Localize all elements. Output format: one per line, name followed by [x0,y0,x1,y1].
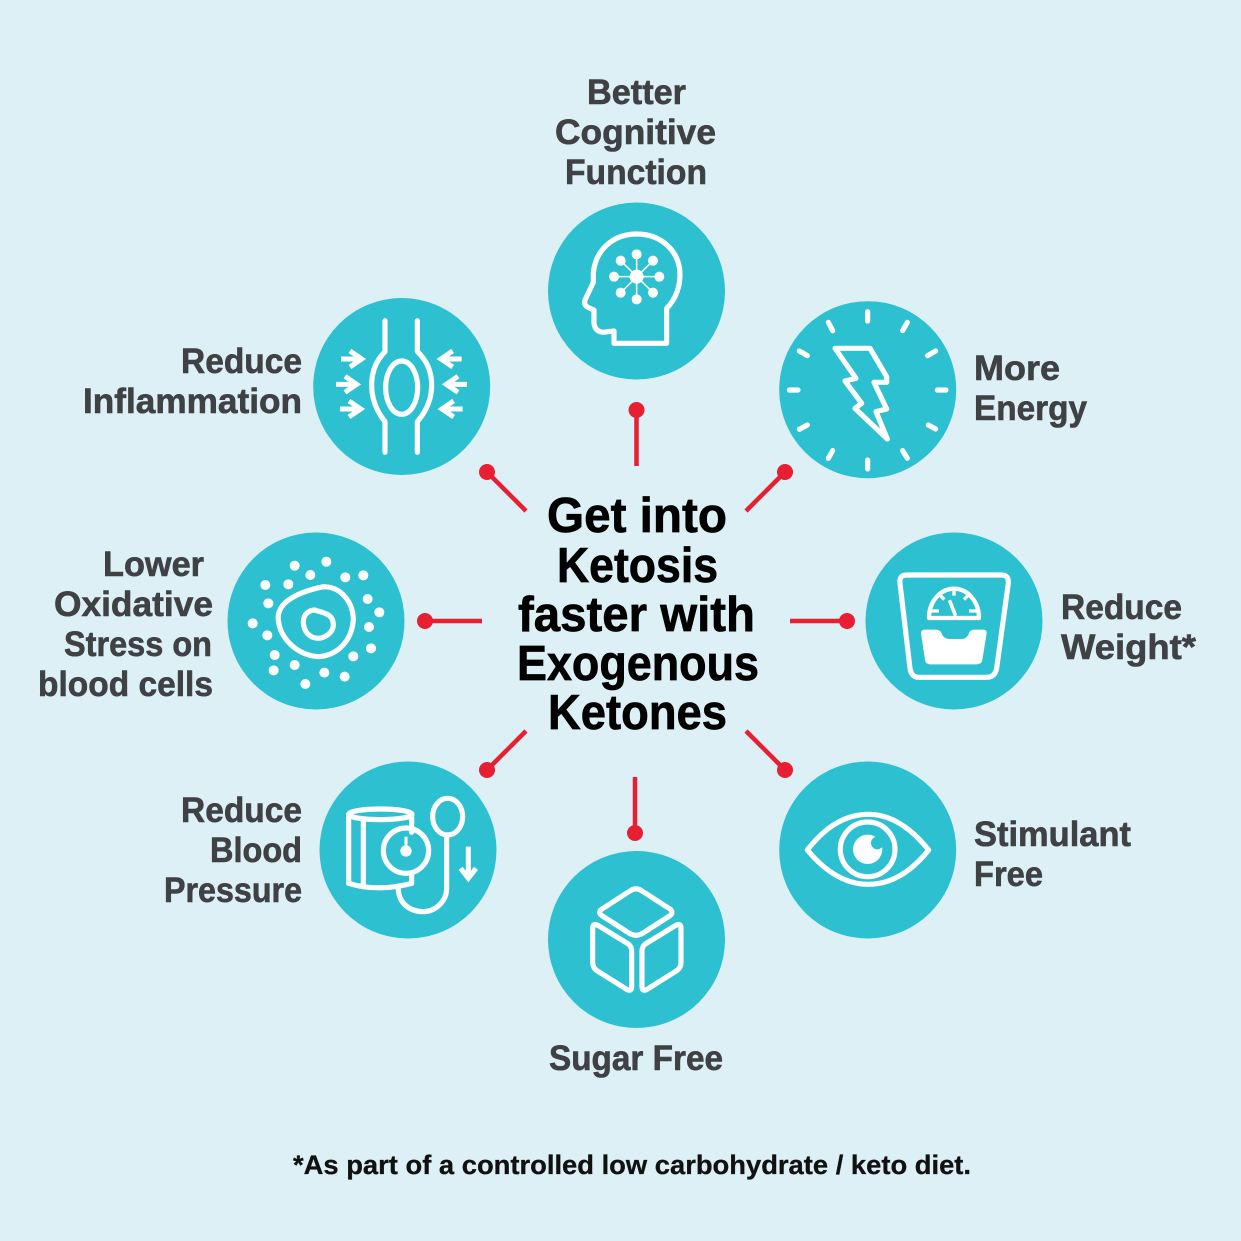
connector: lower left [479,731,526,778]
label: reduce weight: Weight* [1061,628,1196,667]
label: reduce weight [1061,588,1196,667]
connector: lower right [746,731,793,778]
connector: top [628,402,644,466]
central heading: faster with [518,588,755,642]
icon: weighing scale [900,575,1008,677]
label: reduce inflammation [83,342,302,421]
label: better cognitive function: Cognitive [555,113,716,152]
icon disc [313,298,490,475]
label: better cognitive function: Function [565,153,707,192]
label: lower oxidative stress on blood cells: blood cells [38,665,213,704]
label: better cognitive function [555,73,716,192]
label: stimulant free: Stimulant [974,815,1131,854]
panel: reduce inflammation [83,298,490,475]
label: reduce blood pressure [164,791,302,910]
label: lower oxidative stress on blood cells: Oxidative [54,585,213,624]
icon: clock with lightning bolt [789,312,946,469]
icon: blood cell with particles [248,557,384,689]
icon: blood pressure cuff [349,798,476,912]
panel: more energy [779,301,1088,478]
label: better cognitive function: Better [587,73,686,112]
label: more energy: More [974,349,1060,388]
icon disc [320,762,496,938]
central heading: Ketones [548,686,727,740]
icon disc [866,532,1042,710]
icon: eye [807,814,929,884]
panel: reduce weight [866,532,1196,710]
icon disc [548,851,725,1028]
panel: stimulant free [779,762,1131,938]
label: more energy [974,349,1088,428]
footnote: *As part of a controlled low carbohydrate / keto diet. [293,1150,971,1180]
label: reduce inflammation: Reduce [181,342,302,381]
connector: left [417,613,482,629]
central heading: Ketosis [557,539,718,593]
icon: joint with inward arrows [336,321,467,452]
panel: reduce blood pressure [164,762,496,938]
panel: lower oxidative stress [38,532,404,710]
label: lower oxidative stress on blood cells: Stress on [64,625,212,664]
central heading: Get into [547,489,727,543]
central heading: Exogenous [517,637,759,691]
icon: sugar cube [593,889,681,990]
connector: upper right [746,464,793,511]
panel: better cognitive function [548,73,725,380]
icon disc [228,532,404,710]
label: sugar free: Sugar Free [549,1039,723,1078]
icon disc [779,301,956,478]
icon: head with neural network [585,234,680,343]
label: reduce inflammation: Inflammation [83,382,302,421]
connector: right [790,613,855,629]
label: reduce blood pressure: Pressure [164,871,302,910]
panel: sugar free [548,851,725,1078]
connector: upper left [479,464,526,511]
label: lower oxidative stress on blood cells [38,545,213,704]
label: stimulant free: Free [974,855,1043,894]
label: stimulant free [974,815,1131,894]
central heading [517,489,759,740]
label: reduce blood pressure: Blood [210,831,302,870]
label: reduce blood pressure: Reduce [181,791,302,830]
label: reduce weight: Reduce [1061,588,1182,627]
label: more energy: Energy [974,389,1088,428]
icon disc [548,202,725,380]
icon disc [779,762,956,938]
label: lower oxidative stress on blood cells: Lower [103,545,204,584]
connector: bottom [627,777,643,841]
